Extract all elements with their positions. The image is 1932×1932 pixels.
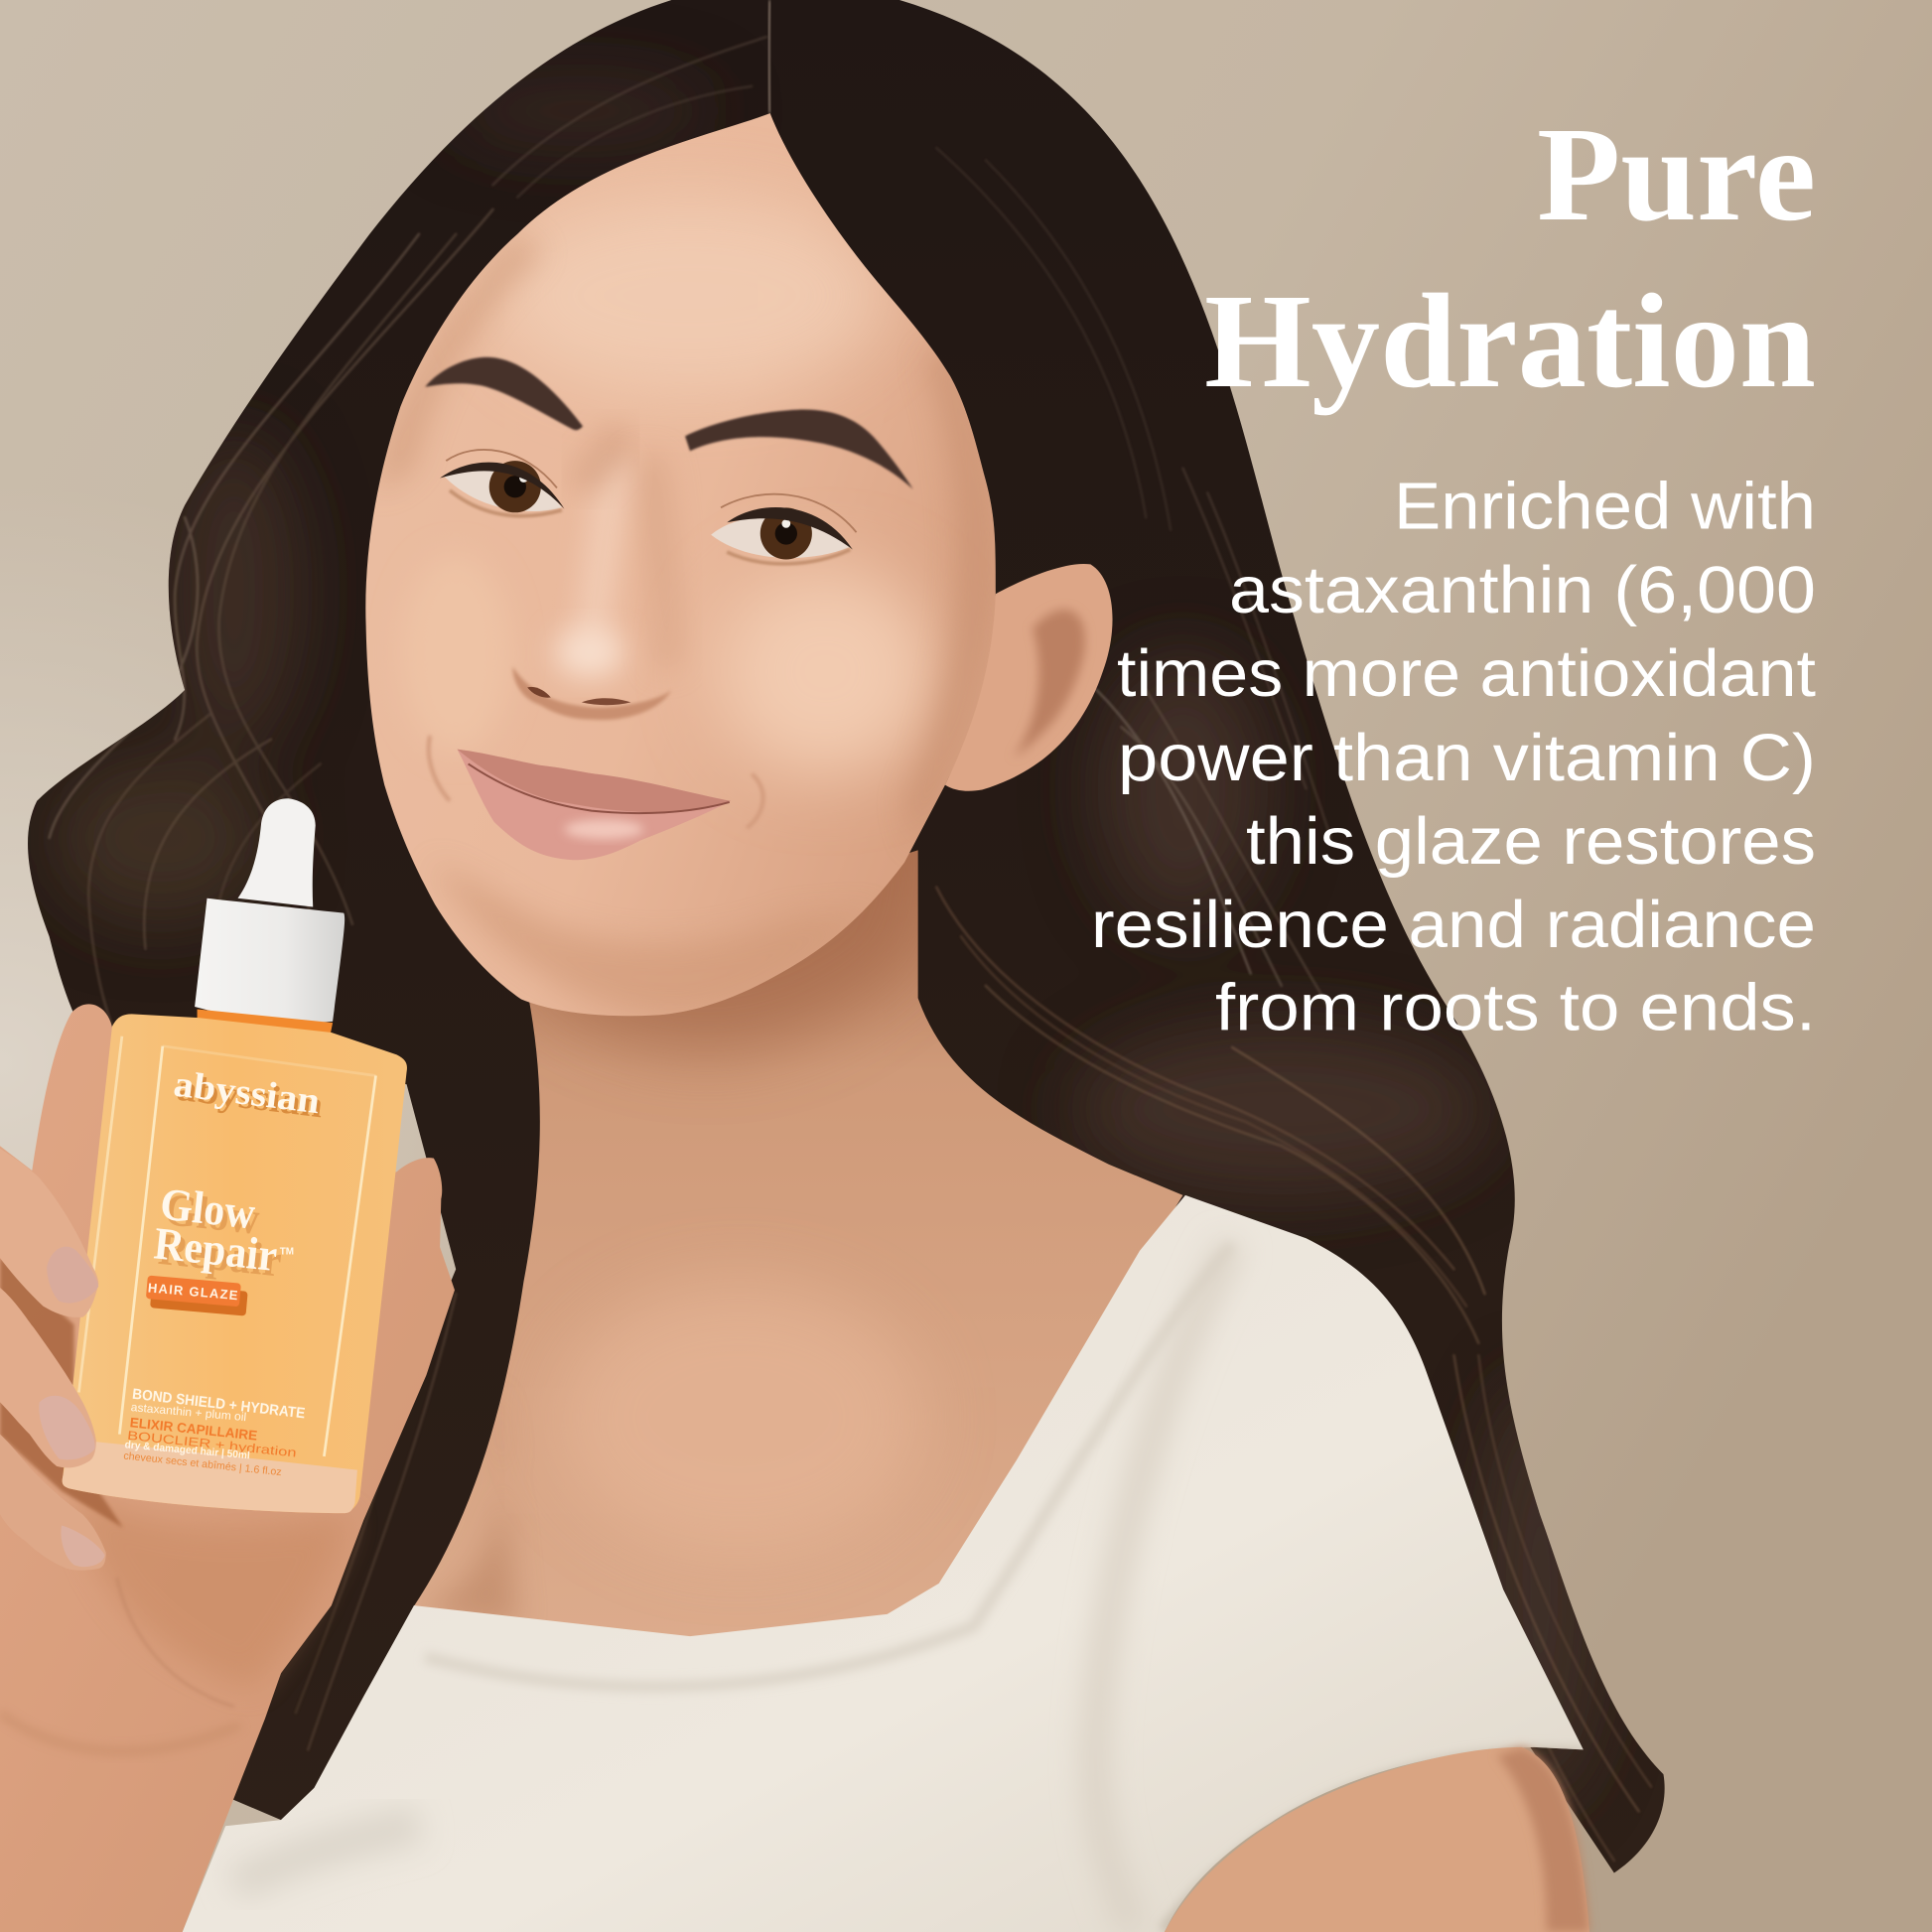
bottle small print: ELIXIR CAPILLAIRE (129, 1415, 258, 1444)
product name: Repair (152, 1217, 280, 1281)
body copy: astaxanthin (6,000 (1229, 553, 1816, 627)
body copy: resilience and radiance (1091, 888, 1816, 962)
fingers over bottle (0, 1149, 106, 1571)
brand name: abyssian (172, 1064, 323, 1122)
shirt (183, 1195, 1584, 1932)
glass body (63, 1014, 407, 1513)
dropper collar (195, 898, 345, 1023)
glass edge lines (78, 1036, 376, 1456)
face (365, 113, 996, 1017)
bottle small print: BOUCLIER + hydration (127, 1429, 297, 1460)
heading (1204, 100, 1816, 416)
eyebrows (425, 357, 913, 489)
bottle small print: dry & damaged hair | 50ml (124, 1439, 250, 1461)
product name (152, 1178, 294, 1287)
neck and chest (413, 788, 1182, 1639)
lips (457, 750, 731, 860)
product name: TM (280, 1246, 294, 1257)
left eye (440, 450, 564, 516)
hair glaze badge: HAIR GLAZE (147, 1280, 239, 1303)
body copy: times more antioxidant (1117, 636, 1816, 711)
shadow beside bottle (0, 1257, 123, 1528)
right eye (711, 494, 857, 564)
ear (945, 564, 1113, 791)
heading: Pure (1537, 100, 1816, 249)
body copy (1091, 469, 1816, 1044)
bottle small print: astaxanthin + plum oil (130, 1401, 247, 1424)
body copy: Enriched with (1394, 469, 1816, 544)
body copy: this glaze restores (1246, 804, 1816, 879)
product name: Repair (156, 1223, 284, 1287)
nose (512, 628, 671, 720)
bottle small print (123, 1387, 306, 1478)
product name: Glow (158, 1178, 257, 1238)
hair glaze badge (145, 1276, 248, 1316)
product name: Glow (162, 1183, 262, 1244)
arm (1165, 1747, 1589, 1932)
heading: Hydration (1204, 267, 1816, 416)
clear glass base (63, 1440, 357, 1513)
bottle small print: BOND SHIELD + HYDRATE (131, 1387, 306, 1422)
glass neck (198, 1009, 333, 1035)
bottle small print: cheveux secs et abîmés | 1.6 fl.oz (123, 1450, 282, 1478)
serum bottle (63, 798, 407, 1513)
brand name: abyssian (175, 1068, 326, 1126)
hand (0, 1004, 455, 1932)
dropper bulb (238, 798, 316, 906)
body copy: from roots to ends. (1215, 971, 1816, 1044)
body copy: power than vitamin C) (1118, 721, 1816, 795)
